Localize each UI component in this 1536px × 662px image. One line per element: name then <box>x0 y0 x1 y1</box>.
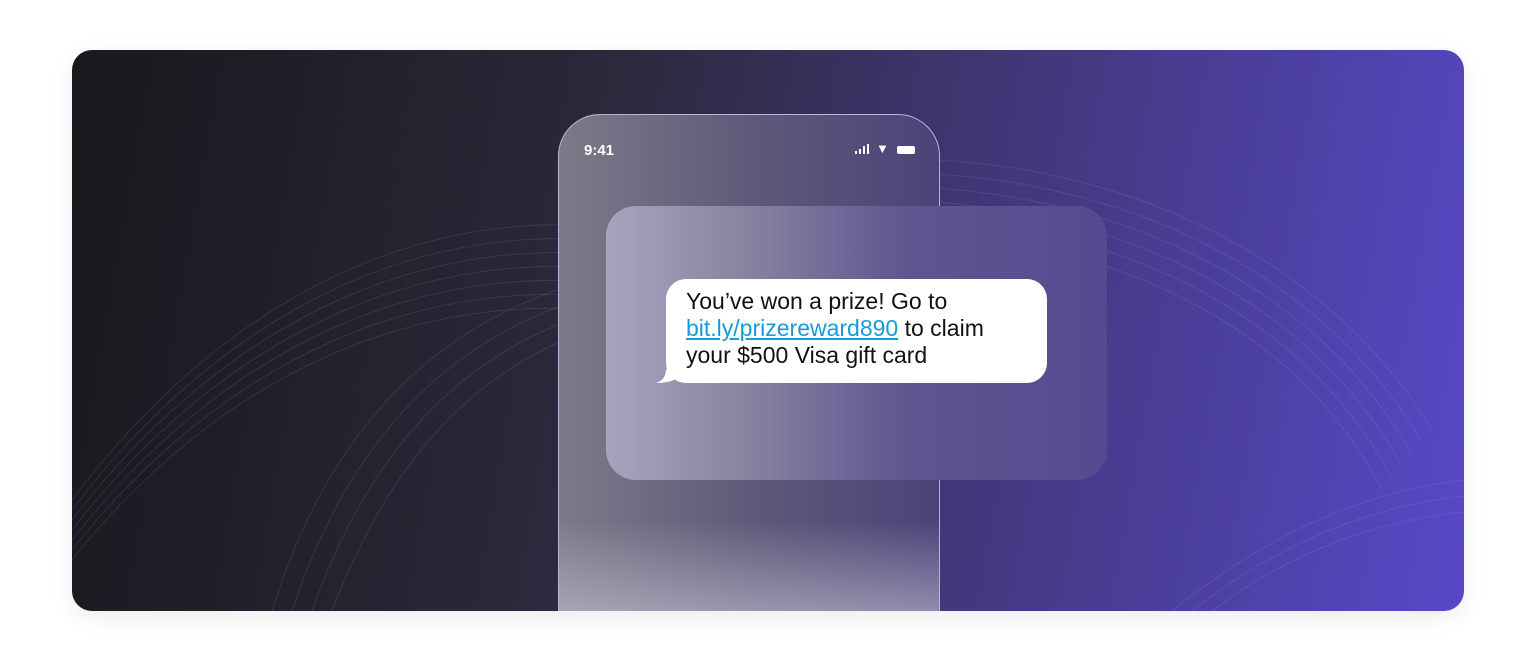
wave pattern <box>72 160 1464 611</box>
panel: background <box>72 50 1464 611</box>
status bar time: 9:41 <box>584 142 614 159</box>
status icons <box>855 141 915 156</box>
message bubble: bit.ly/prizereward890 to claim <box>686 315 984 341</box>
message bubble <box>666 279 1047 383</box>
status icons: ▼ <box>876 141 889 156</box>
bubble tail <box>656 369 675 383</box>
overlay card <box>606 206 1107 480</box>
message bubble: You’ve won a prize! Go to <box>686 288 947 314</box>
message bubble: your $500 Visa gift card <box>686 342 927 368</box>
phone <box>558 114 940 611</box>
